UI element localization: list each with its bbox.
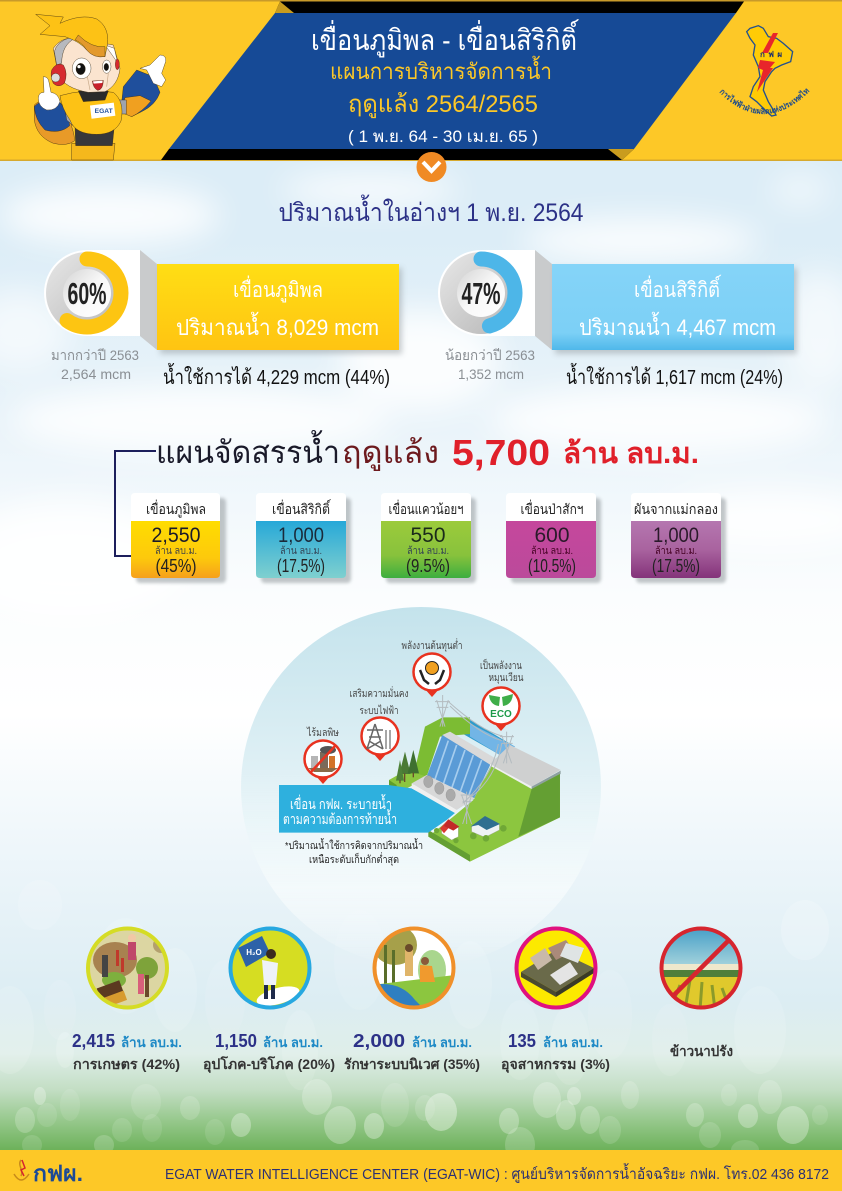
comparison with 2563: 1,352 mcm [458,366,524,382]
footnote: *ปริมาณน้ำใช้การคิดจากปริมาณน้ำ [285,838,423,852]
illustration: hydro dam [279,695,561,862]
icon: grid stability pin [350,686,408,761]
card: Mae Klong [631,493,726,583]
icon: EGAT footer logo: กฟผ. [33,1161,83,1186]
value [353,1031,472,1051]
grey fold [140,250,157,350]
icon: EGAT Thailand logo [719,25,810,117]
footer bar [0,1150,842,1191]
card: Bhumibol: ล้าน ลบ.ม. [155,545,197,557]
icon: drinking water: H₂O [246,948,262,957]
comparison with 2563: 2,564 mcm [61,366,131,382]
black top band [275,2,744,13]
card: Pa Sak: เขื่อนป่าสักฯ [520,500,584,517]
value: ล้าน ลบ.ม. [121,1035,182,1050]
card: Khwae Noi [381,493,476,583]
icon: no pollution pin [304,726,342,784]
footnote [285,838,423,866]
houses [434,816,507,843]
spillway base [412,775,475,810]
value: ล้าน ลบ.ม. [543,1035,603,1050]
blue title panel [169,13,736,149]
card: Sirikit: (17.5%) [277,556,325,576]
donut 47%: 47% [462,276,500,311]
volume: ปริมาณน้ำ 8,029 mcm [176,312,379,340]
label: อุจสาหกรรม (3%) [501,1056,610,1073]
panel: consumption [203,928,335,1073]
card: Sirikit: เขื่อนสิริกิติ์ [272,499,332,517]
card: Mae Klong: 1,000 [653,524,699,547]
footnote: เหนือระดับเก็บกักต่ำสุด [309,852,399,866]
header title: ฤดูแล้ง 2564/2565 [348,91,538,119]
card: Pa Sak [506,493,601,583]
logo initials: ก ฟ ผ [760,50,782,59]
white folded backing [481,250,535,336]
left bank [412,717,470,783]
yellow header ground [0,1,842,160]
blue box [552,264,794,350]
value [508,1031,603,1051]
label: อุปโภค-บริโภค (20%) [203,1055,335,1073]
card: Khwae Noi: (9.5%) [406,556,450,576]
icon: orange down chevron [416,152,446,182]
panel: Bhumibol dam [44,250,402,389]
value: ล้าน ลบ.ม. [263,1035,323,1050]
comparison with 2563 [51,347,139,382]
heading: dry season allocation: แผนจัดสรรน้ำ [156,430,340,470]
icon: no pollution pin: ไร้มลพิษ [306,726,339,739]
panel: Sirikit dam [438,250,797,389]
icon: EGAT footer logo [14,1160,83,1186]
card: Bhumibol: เขื่อนภูมิพล [146,500,206,518]
card: Khwae Noi: 550 [410,524,446,547]
card: Sirikit: ล้าน ลบ.ม. [280,545,322,557]
river and banner [279,785,457,833]
reservoir water [453,720,515,755]
donut 60% [44,250,130,336]
usable volume: น้ำใช้การได้ 1,617 mcm (24%) [566,363,783,389]
comparison with 2563: น้อยกว่าปี 2563 [445,347,535,363]
circular backdrop for dam illustration [241,607,601,967]
trees [396,750,419,783]
panel: off-season rice [660,925,745,1059]
banner text: EGAT dam releases water: เขื่อน กฟผ. ระบายน้ำ [290,794,392,812]
banner text: EGAT dam releases water: ตามความต้องการท้ายน้ำ [283,809,397,827]
volume: ปริมาณน้ำ 4,467 mcm [579,312,776,340]
donut 60%: 60% [68,276,106,311]
card: Khwae Noi: ล้าน ลบ.ม. [407,545,449,557]
label: การเกษตร (42%) [73,1056,180,1072]
icon: rice field prohibited [660,925,745,1011]
bokeh light spots [0,880,829,1163]
header title: แผนการบริหารจัดการน้ำ [330,56,552,84]
banner text: EGAT dam releases water [283,794,397,827]
icon: low cost energy pin: พลังงานต้นทุนต่ำ [402,638,462,652]
icon: grid stability pin: เสริมความมั่นคง [350,686,408,700]
icon: factories [516,928,596,1008]
value: 1,150 [215,1031,257,1051]
card: Pa Sak: 600 [534,524,570,547]
card: Mae Klong: ล้าน ลบ.ม. [655,545,697,557]
spillway face [427,735,491,800]
dam crest [442,732,498,765]
red lightning bolt [762,33,778,53]
panel: industry [501,928,610,1073]
card: Pa Sak: (10.5%) [528,556,576,576]
header title [311,19,579,146]
card: Mae Klong: ผันจากแม่กลอง [634,501,718,517]
icon: grid stability pin: ระบบไฟฟ้า [360,704,398,717]
box shadow [555,268,797,354]
allocation cards [131,493,726,583]
card: Mae Klong: (17.5%) [652,556,700,576]
header title: เขื่อนภูมิพล - เขื่อนสิริกิติ์ [311,19,579,58]
icon: renewable energy ECO pin: หมุนเวียน [488,671,524,684]
header banner [0,0,842,168]
connector line [115,451,156,556]
box shadow [160,268,402,354]
heading: reservoir volume: ปริมาณน้ำในอ่างฯ 1 พ.ย. 2564 [278,194,584,227]
label: รักษาระบบนิเวศ (35%) [344,1056,480,1072]
card: Sirikit: 1,000 [278,524,324,547]
icon: forest and stream [372,925,455,1010]
value: 2,415 [72,1031,115,1051]
icon: farming [85,925,170,1010]
card: Bhumibol: 2,550 [152,524,200,547]
label: ข้าวนาปรัง [670,1043,733,1059]
icon: renewable energy ECO pin: ECO [490,709,512,720]
heading: dry season allocation: ฤดูแล้ง [342,435,439,471]
icon: low cost energy pin [402,638,462,697]
card: Bhumibol: (45%) [156,556,196,576]
value: 135 [508,1031,536,1051]
black bottom band [161,149,634,160]
heading: dry season allocation: ล้าน ลบ.ม. [563,438,699,470]
header title: ( 1 พ.ย. 64 - 30 เม.ย. 65 ) [348,127,538,146]
icon: renewable energy ECO pin: เป็นพลังงาน [480,658,522,672]
value: 2,000 [353,1031,405,1051]
icon: EGAT mascot [34,14,166,160]
grey fold [535,250,552,350]
white folded backing [87,250,140,336]
card: Pa Sak: ล้าน ลบ.ม. [531,545,573,557]
panel: ecosystem [344,925,480,1072]
card: Bhumibol [131,493,226,583]
dam name: เขื่อนภูมิพล [233,275,323,303]
yellow box [157,264,399,350]
card: Sirikit [256,493,351,583]
background clouds [0,174,842,620]
panel: agriculture [72,925,182,1072]
dam name: เขื่อนสิริกิติ์ [634,274,722,302]
donut 47% [438,250,524,336]
comparison with 2563: มากกว่าปี 2563 [51,347,139,363]
Thailand map outline [747,26,793,116]
heading: dry season allocation: 5,700 [452,432,550,473]
comparison with 2563 [445,347,535,382]
icon: EGAT mascot: EGAT [95,108,113,115]
pylons and power lines [435,695,514,824]
right bank [428,766,560,862]
heading: dry season allocation [156,430,699,473]
value [215,1031,323,1051]
icon: drinking water [230,928,310,1009]
value: ล้าน ลบ.ม. [412,1035,472,1050]
value [72,1031,182,1051]
icon: renewable energy ECO pin [480,658,524,731]
card: Khwae Noi: เขื่อนแควน้อยฯ [388,500,464,517]
usable volume: น้ำใช้การได้ 4,229 mcm (44%) [163,363,390,389]
